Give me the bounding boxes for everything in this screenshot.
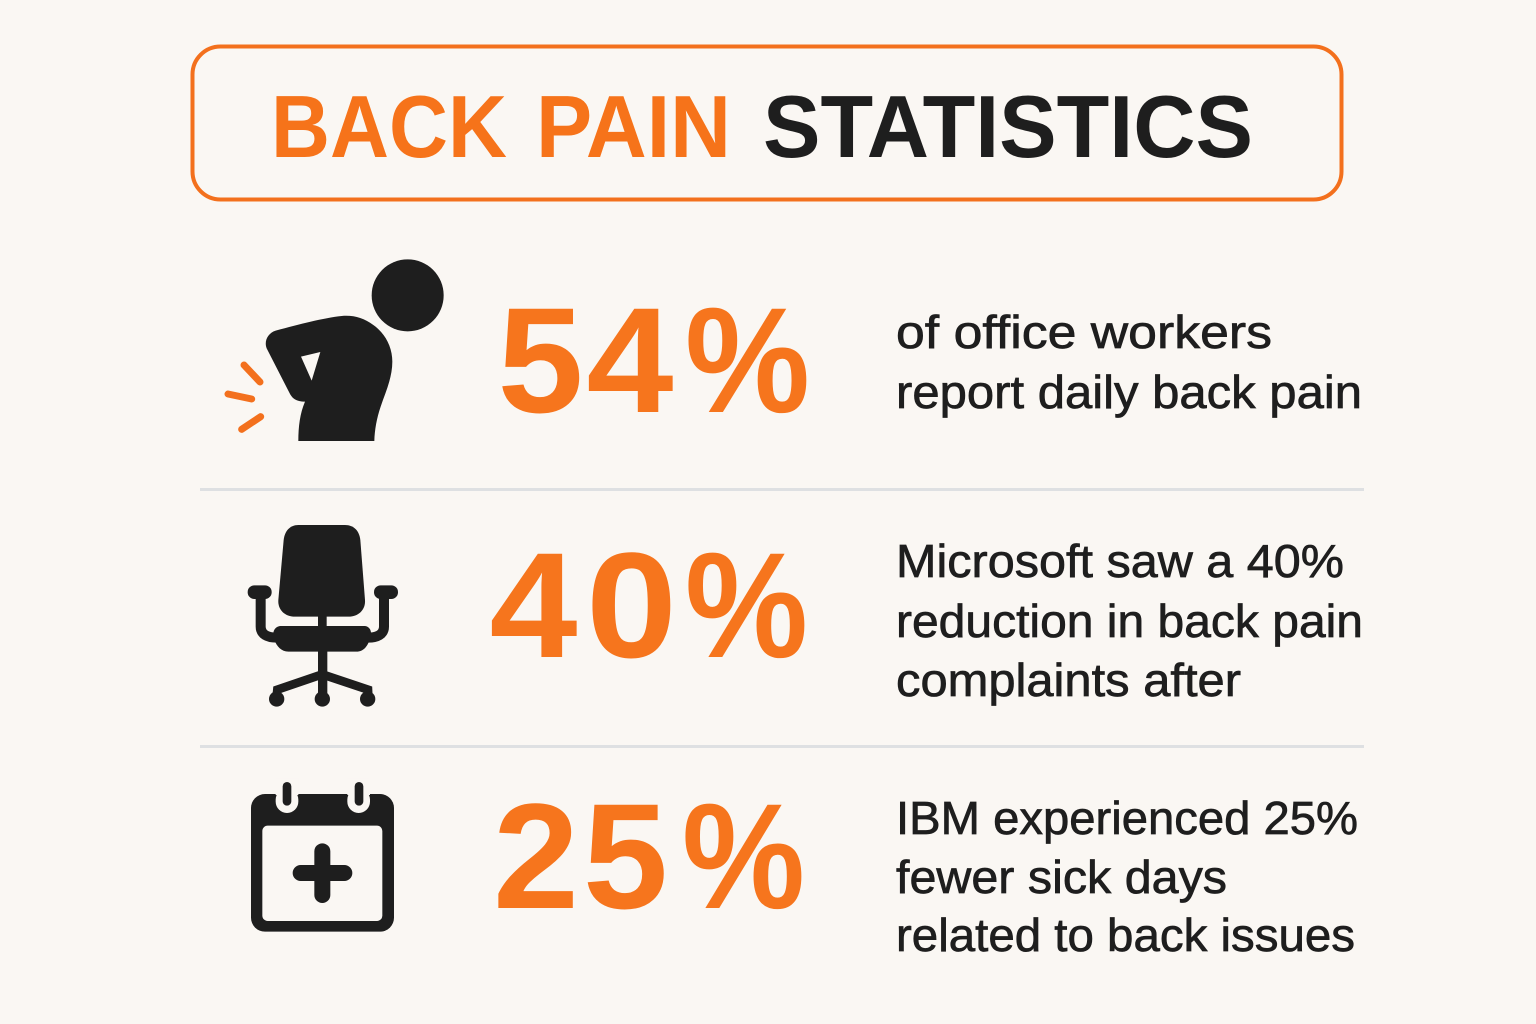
text: IBM: fewer sick days <box>896 851 1227 903</box>
title: PAIN <box>536 77 731 176</box>
title box <box>192 46 1342 200</box>
stat: 25%: 2 <box>493 772 579 940</box>
text: Microsoft: Microsoft saw a 40% <box>896 535 1344 587</box>
stat: 40%: 0 <box>586 521 677 689</box>
title: BACK <box>271 77 507 176</box>
text: IBM: related to back issues <box>896 909 1355 961</box>
stat: 25%: 5 <box>583 772 668 940</box>
text: office workers: report daily back pain <box>896 366 1362 418</box>
stat: 54%: 4 <box>586 276 674 444</box>
title: STATISTICS <box>763 77 1253 176</box>
text: IBM: IBM experienced 25% <box>896 792 1358 844</box>
pain marks <box>228 365 261 429</box>
stat: 25%: % <box>682 772 805 940</box>
stat: 40%: 4 <box>490 521 578 689</box>
stat: 54%: % <box>685 276 810 444</box>
text: office workers: of office workers <box>896 306 1272 358</box>
text: Microsoft: reduction in back pain <box>896 595 1363 647</box>
stat: 40%: % <box>685 521 808 689</box>
stat: 54%: 5 <box>498 276 584 444</box>
text: Microsoft: complaints after <box>896 654 1241 706</box>
icon: person with back pain <box>228 259 444 441</box>
icon: medical calendar <box>251 778 394 932</box>
icon: office chair <box>248 525 398 707</box>
